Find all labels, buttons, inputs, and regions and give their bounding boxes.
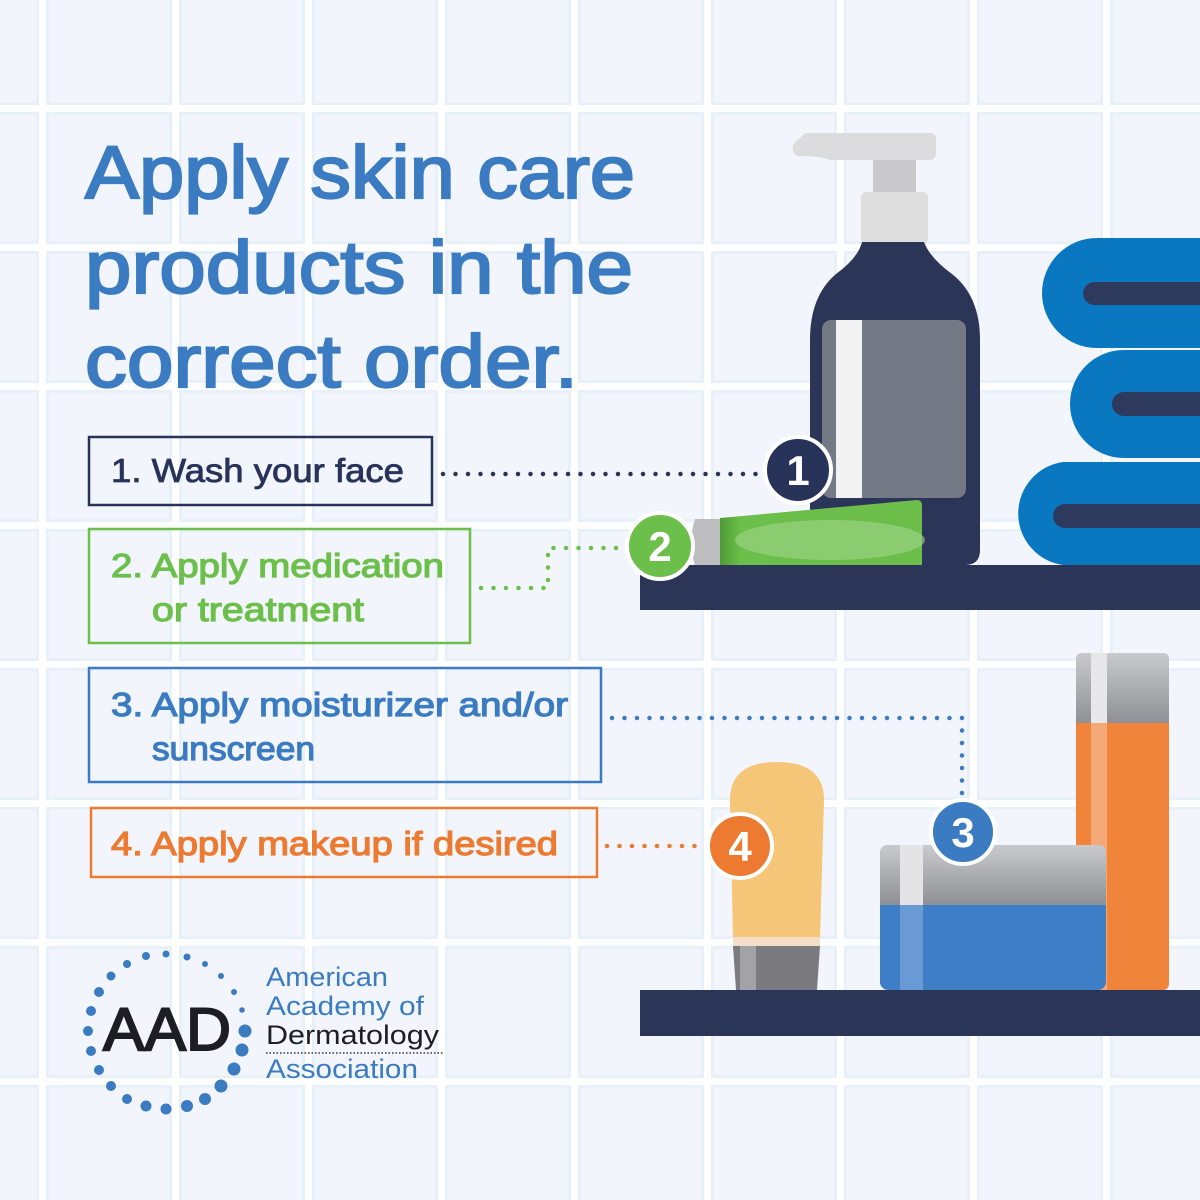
shelf 2 xyxy=(640,990,1200,1036)
logo: AAD: Dermatology xyxy=(266,1020,440,1050)
step 3 box xyxy=(89,668,601,782)
badge 3 xyxy=(931,800,995,864)
step 3 box: 3. Apply moisturizer and/or xyxy=(111,686,568,723)
step 4 box xyxy=(91,808,597,877)
logo: AAD: Academy of xyxy=(266,991,425,1021)
towels xyxy=(1018,238,1200,565)
badge 3: 3 xyxy=(951,809,975,856)
badge 1 xyxy=(765,437,831,503)
badge 1: 1 xyxy=(786,447,810,494)
badge 2 xyxy=(627,513,693,579)
logo: AAD: American xyxy=(266,962,388,992)
logo: AAD xyxy=(83,950,443,1114)
step 2 box xyxy=(89,529,470,643)
badge 4: 4 xyxy=(728,823,752,870)
title: correct order. xyxy=(85,320,578,403)
step 1 box: 1. Wash your face xyxy=(111,452,404,489)
title: Apply skin care xyxy=(85,131,635,214)
badge 4 xyxy=(708,814,772,878)
step 1 box xyxy=(89,437,432,505)
yellow tube xyxy=(730,762,824,990)
badge 2: 2 xyxy=(648,523,672,570)
step 2 box: 2. Apply medication xyxy=(111,547,444,584)
title: products in the xyxy=(85,226,633,309)
shelf 1 xyxy=(640,565,1200,610)
logo: AAD: AAD xyxy=(103,996,231,1063)
logo: AAD: Association xyxy=(266,1054,418,1084)
green tube xyxy=(692,500,925,565)
dotted connectors xyxy=(443,474,962,846)
jar xyxy=(880,845,1106,990)
title xyxy=(85,131,635,403)
step 2 box: or treatment xyxy=(152,591,364,628)
step 4 box: 4. Apply makeup if desired xyxy=(111,825,558,862)
pump bottle xyxy=(793,133,980,565)
orange bottle xyxy=(1076,653,1169,990)
step 3 box: sunscreen xyxy=(152,730,315,767)
